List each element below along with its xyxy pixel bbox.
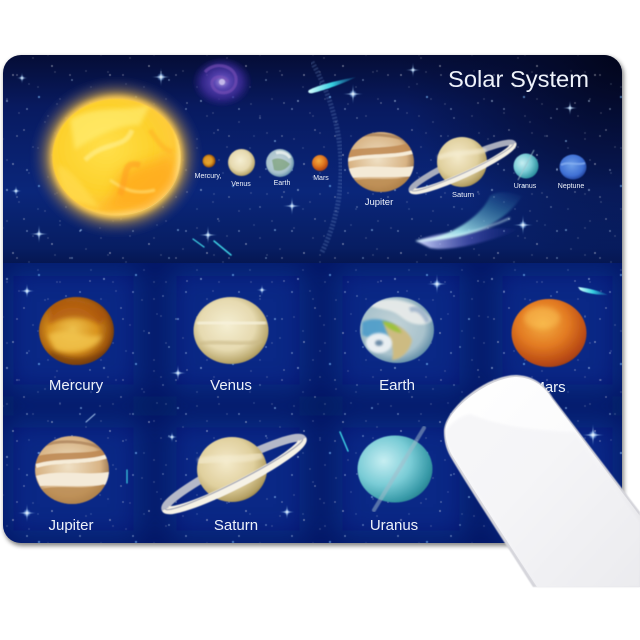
shooting star streaks <box>86 239 348 483</box>
icon: large comet <box>416 192 522 249</box>
medium jupiter <box>345 132 417 195</box>
label: Mars: Mars <box>532 379 566 396</box>
star field <box>3 55 622 543</box>
large jupiter <box>35 436 110 506</box>
small neptune <box>560 154 586 180</box>
dark top right corner <box>437 55 622 240</box>
mouse pad shadow <box>4 57 624 546</box>
label: Jupiter: Jupiter <box>48 517 94 534</box>
label: Uranus small: Uranus <box>514 183 537 190</box>
large earth <box>360 297 434 363</box>
small venus <box>228 149 255 176</box>
large saturn with rings <box>160 429 308 519</box>
large planet labels <box>48 377 566 534</box>
panel: upper solar system background <box>3 55 622 265</box>
small uranus <box>514 150 538 180</box>
label: Jupiter small: Jupiter <box>365 197 393 208</box>
large uranus <box>358 428 432 510</box>
milky way arc <box>312 62 341 252</box>
icon: spiral galaxy <box>194 58 250 105</box>
small earth <box>266 149 294 177</box>
large mars <box>512 299 586 367</box>
icon: small comet top <box>308 77 356 93</box>
row: small planets lineup <box>202 132 586 198</box>
large mercury <box>39 297 114 370</box>
label: Venus small: Venus <box>231 181 251 188</box>
label: Mercury small: Mercury, <box>195 173 221 180</box>
medium saturn with rings <box>408 136 517 198</box>
icon: sun <box>30 77 202 237</box>
large venus <box>194 297 268 364</box>
label: Venus: Venus <box>210 377 252 394</box>
label: Mercury: Mercury <box>49 377 104 394</box>
label: Saturn: Saturn <box>214 517 258 534</box>
panel: lower planet tile background <box>3 263 622 543</box>
label: Earth small: Earth <box>274 180 290 187</box>
small mars <box>312 155 328 171</box>
icon: white computer mouse <box>444 375 640 587</box>
small mercury <box>202 154 216 168</box>
label: Neptune small: Neptune <box>558 183 584 190</box>
label: Earth: Earth <box>379 377 415 394</box>
heading: Solar System: Solar System <box>448 66 589 92</box>
label: Saturn small: Saturn <box>452 190 474 199</box>
icon: comet right of mars <box>578 287 608 295</box>
small planet labels <box>195 173 584 208</box>
icon: sparkle stars <box>10 62 605 523</box>
label: Mars small: Mars <box>313 175 329 182</box>
label: Uranus: Uranus <box>370 517 418 534</box>
